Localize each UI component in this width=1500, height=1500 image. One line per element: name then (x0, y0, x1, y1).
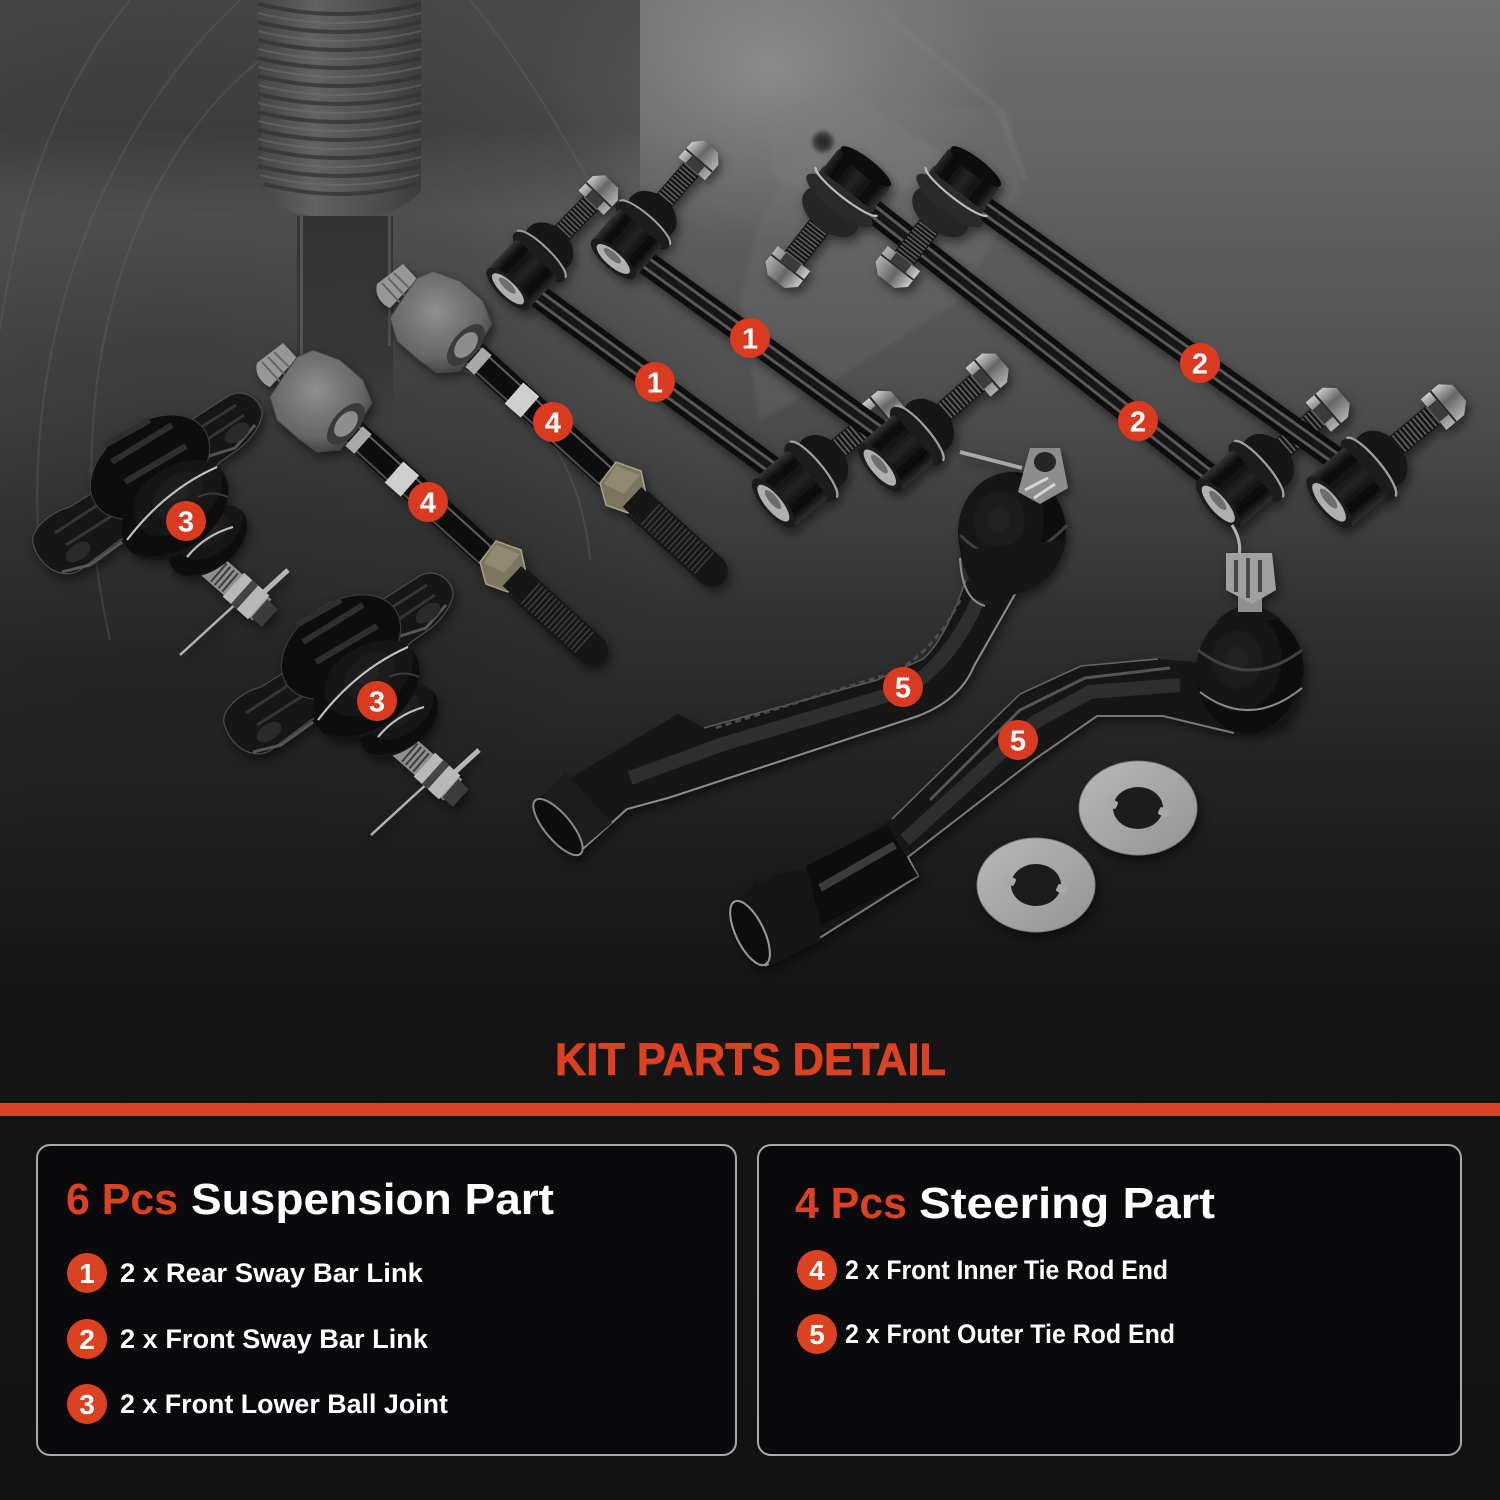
washer, lower (977, 838, 1095, 932)
chassis bracket (740, 10, 1025, 420)
sway bar link 1 (rear) (476, 158, 921, 539)
marker 2: 2 (1130, 406, 1146, 438)
marker 3: 3 (178, 506, 194, 538)
marker 2: 2 (1192, 348, 1208, 380)
marker 1: 1 (647, 368, 663, 400)
sway bar link 1b (rear) (581, 124, 1026, 503)
item 4: 4 (809, 1255, 825, 1286)
shock absorber bellows (258, 0, 421, 426)
wheel arcs (0, 0, 600, 640)
sway bar link 2 (front) (744, 135, 1368, 540)
marker 1 (635, 362, 675, 402)
heading: 6 pcs suspension part: 6 Pcs (66, 1175, 178, 1224)
title: KIT PARTS DETAIL (555, 1034, 946, 1085)
marker 5 (998, 720, 1038, 760)
panel: suspension part (37, 1145, 736, 1455)
inner tie rod end, lower (256, 343, 592, 650)
item 3 (67, 1384, 448, 1424)
ball joint, upper (33, 393, 288, 655)
sway bar link 2b (front) (854, 135, 1484, 539)
marker 5 (883, 667, 923, 707)
parts photo (33, 124, 1484, 971)
item 5: 5 (809, 1319, 825, 1350)
item 2 (67, 1319, 429, 1359)
item 3: 2 x Front Lower Ball Joint (120, 1389, 448, 1419)
item 4: 2 x Front Inner Tie Rod End (845, 1255, 1168, 1285)
heading: 4 pcs steering part: 4 Pcs (795, 1179, 907, 1228)
panel: steering part (758, 1145, 1461, 1455)
item 1: 2 x Rear Sway Bar Link (120, 1258, 424, 1288)
part number markers (166, 318, 1220, 760)
marker 4 (408, 482, 448, 522)
outer tie rod end, upper (526, 448, 1068, 862)
item 4 (797, 1250, 1168, 1290)
marker 4: 4 (420, 488, 436, 520)
item 1 (67, 1253, 424, 1293)
inner tie rod end, upper (376, 264, 712, 571)
ball joint, lower (224, 573, 479, 835)
marker 4 (533, 402, 573, 442)
item 2: 2 x Front Sway Bar Link (120, 1324, 429, 1354)
marker 1: 1 (742, 324, 758, 356)
marker 2 (1118, 401, 1158, 441)
item 5 (797, 1314, 1175, 1354)
outer tie rod end, lower (722, 525, 1304, 971)
marker 4: 4 (545, 408, 561, 440)
marker 1 (730, 318, 770, 358)
item 5: 2 x Front Outer Tie Rod End (845, 1319, 1175, 1349)
washer, upper (1079, 761, 1197, 855)
marker 5: 5 (1010, 726, 1026, 758)
marker 3 (357, 681, 397, 721)
item 2: 2 (79, 1324, 95, 1355)
marker 3: 3 (369, 686, 385, 718)
heading: 4 pcs steering part: Steering Part (919, 1179, 1215, 1228)
red divider bar (0, 1103, 1500, 1116)
marker 5: 5 (895, 672, 911, 704)
marker 3 (166, 501, 206, 541)
marker 2 (1180, 343, 1220, 383)
item 1: 1 (79, 1258, 95, 1289)
item 3: 3 (79, 1389, 95, 1420)
heading: 4 pcs steering part (795, 1179, 1215, 1228)
heading: 6 pcs suspension part: Suspension Part (191, 1175, 554, 1224)
